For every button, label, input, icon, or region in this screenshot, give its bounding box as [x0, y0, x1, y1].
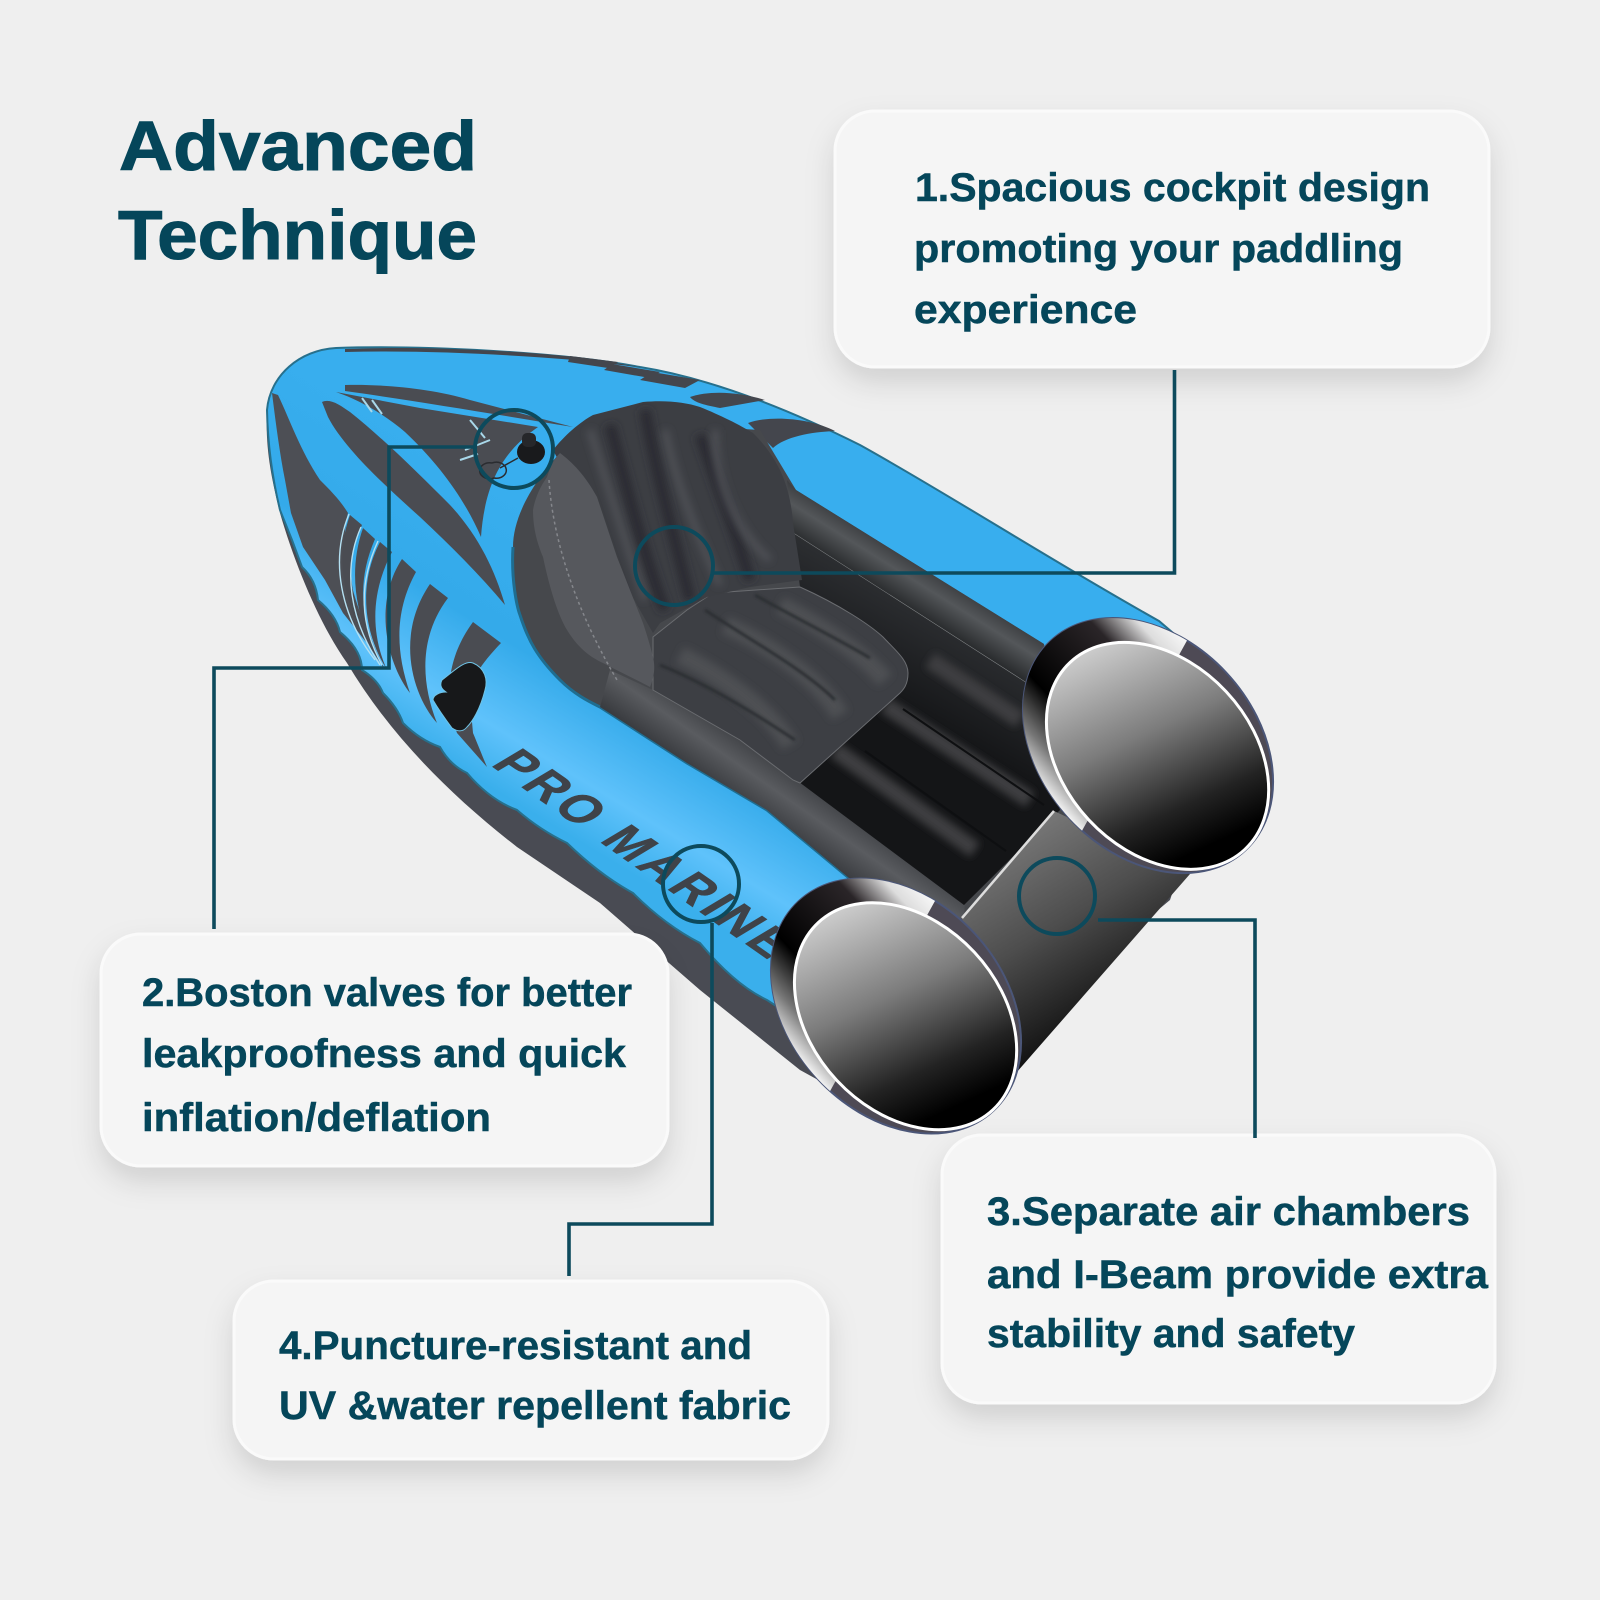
near wall rim line	[513, 547, 849, 878]
beam edge	[962, 811, 1054, 918]
kayak illustration	[266, 346, 1274, 1134]
callout 4: fabric: 4.Puncture-resistant and	[279, 1324, 752, 1368]
callout 3: air chambers: and I-Beam provide extra	[987, 1253, 1489, 1297]
callout 1: cockpit: promoting your paddling	[914, 227, 1403, 271]
D-ring handle	[433, 662, 486, 731]
side stripes	[342, 515, 501, 767]
callout 3: air chambers: stability and safety	[987, 1312, 1356, 1356]
seat cushion	[653, 587, 908, 783]
callout 3: air chambers	[942, 1135, 1495, 1403]
floor ridges	[835, 660, 1030, 850]
callout 1: cockpit	[835, 111, 1489, 367]
near inner wall	[600, 670, 965, 925]
seat left lobe	[533, 453, 654, 687]
callout 2: valves: 2.Boston valves for better	[142, 971, 632, 1015]
title: Technique	[118, 196, 477, 274]
callout 3: air chambers: 3.Separate air chambers	[987, 1190, 1470, 1234]
backrest highlights	[590, 430, 770, 600]
callout 2: valves: leakproofness and quick	[142, 1032, 627, 1076]
upper tube end	[1022, 617, 1274, 874]
connector 3: air chamber to callout 3	[1019, 858, 1255, 1138]
hull underside	[267, 347, 1240, 1125]
callout 2: valves	[101, 934, 668, 1166]
callout 4: fabric: UV &water repellent fabric	[279, 1384, 791, 1428]
I-beam bottom panel	[962, 811, 1190, 1073]
far inner wall	[787, 480, 1044, 682]
lower tube end	[770, 878, 1022, 1134]
far wall seam	[793, 533, 1025, 682]
lobe seam	[549, 480, 617, 680]
PRO MARINE lettering: PRO MARINE	[480, 741, 808, 966]
cushion ridges	[680, 605, 885, 745]
title: Advanced	[119, 107, 477, 185]
seat backrest	[553, 401, 802, 633]
deck dark shapes	[322, 385, 573, 605]
floor seams	[865, 709, 1044, 851]
side pinstripes	[340, 514, 382, 665]
callout 2: valves: inflation/deflation	[142, 1096, 491, 1140]
far rim stripes	[345, 348, 835, 448]
deck logo marks	[362, 398, 490, 460]
cockpit dark coaming	[513, 420, 1075, 925]
callout 4: fabric	[234, 1281, 828, 1459]
cockpit floor	[793, 533, 1060, 905]
callout 1: cockpit: 1.Spacious cockpit design	[915, 166, 1430, 210]
connector 4: fabric to callout 4	[569, 846, 739, 1276]
blue tube body	[267, 347, 1240, 1015]
cushion grooves	[660, 595, 870, 740]
valve	[480, 433, 545, 479]
backrest folds	[610, 410, 750, 610]
connector 2: valve to callout 2	[214, 410, 553, 929]
side graphic panel	[272, 393, 384, 668]
callout 1: cockpit: experience	[914, 288, 1137, 332]
connector 1: seat to callout 1	[635, 370, 1174, 605]
title	[118, 107, 477, 274]
